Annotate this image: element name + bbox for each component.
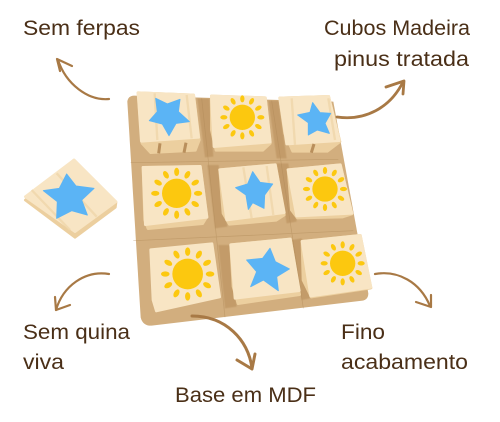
game board	[127, 93, 371, 326]
arrow: Cubos Madeira	[337, 81, 404, 118]
arrow: Sem quina viva	[55, 273, 109, 310]
label: Sem quina viva: Sem quina	[23, 320, 130, 344]
label: Sem ferpas: Sem ferpas	[23, 16, 140, 40]
block 8: star	[231, 239, 300, 304]
block 2: sun	[211, 95, 270, 150]
label: Fino acabamento: Fino	[341, 320, 385, 344]
block 3: star	[280, 96, 340, 153]
block 4: sun	[143, 166, 207, 229]
label: Sem quina viva	[23, 320, 130, 374]
label: Sem quina viva: viva	[23, 350, 64, 374]
block 1: star	[138, 93, 199, 153]
block 9: sun	[302, 235, 371, 297]
label: Base em MDF: Base em MDF	[175, 383, 316, 407]
arrow: Fino acabamento	[375, 273, 431, 307]
block 5: star	[220, 165, 284, 224]
label: Fino acabamento: acabamento	[341, 350, 468, 374]
block 6: sun	[288, 165, 352, 218]
label: Cubos Madeira pinus tratada	[324, 16, 470, 71]
wooden base	[127, 96, 368, 326]
label: Fino acabamento	[341, 320, 468, 374]
block 7: sun	[151, 244, 220, 311]
label: Cubos Madeira pinus tratada: Cubos Madeira	[324, 16, 470, 40]
loose star block	[25, 160, 116, 237]
label: Cubos Madeira pinus tratada: pinus tratada	[334, 47, 469, 71]
arrow: Base em MDF	[192, 316, 255, 369]
arrow: Sem ferpas	[57, 59, 109, 99]
